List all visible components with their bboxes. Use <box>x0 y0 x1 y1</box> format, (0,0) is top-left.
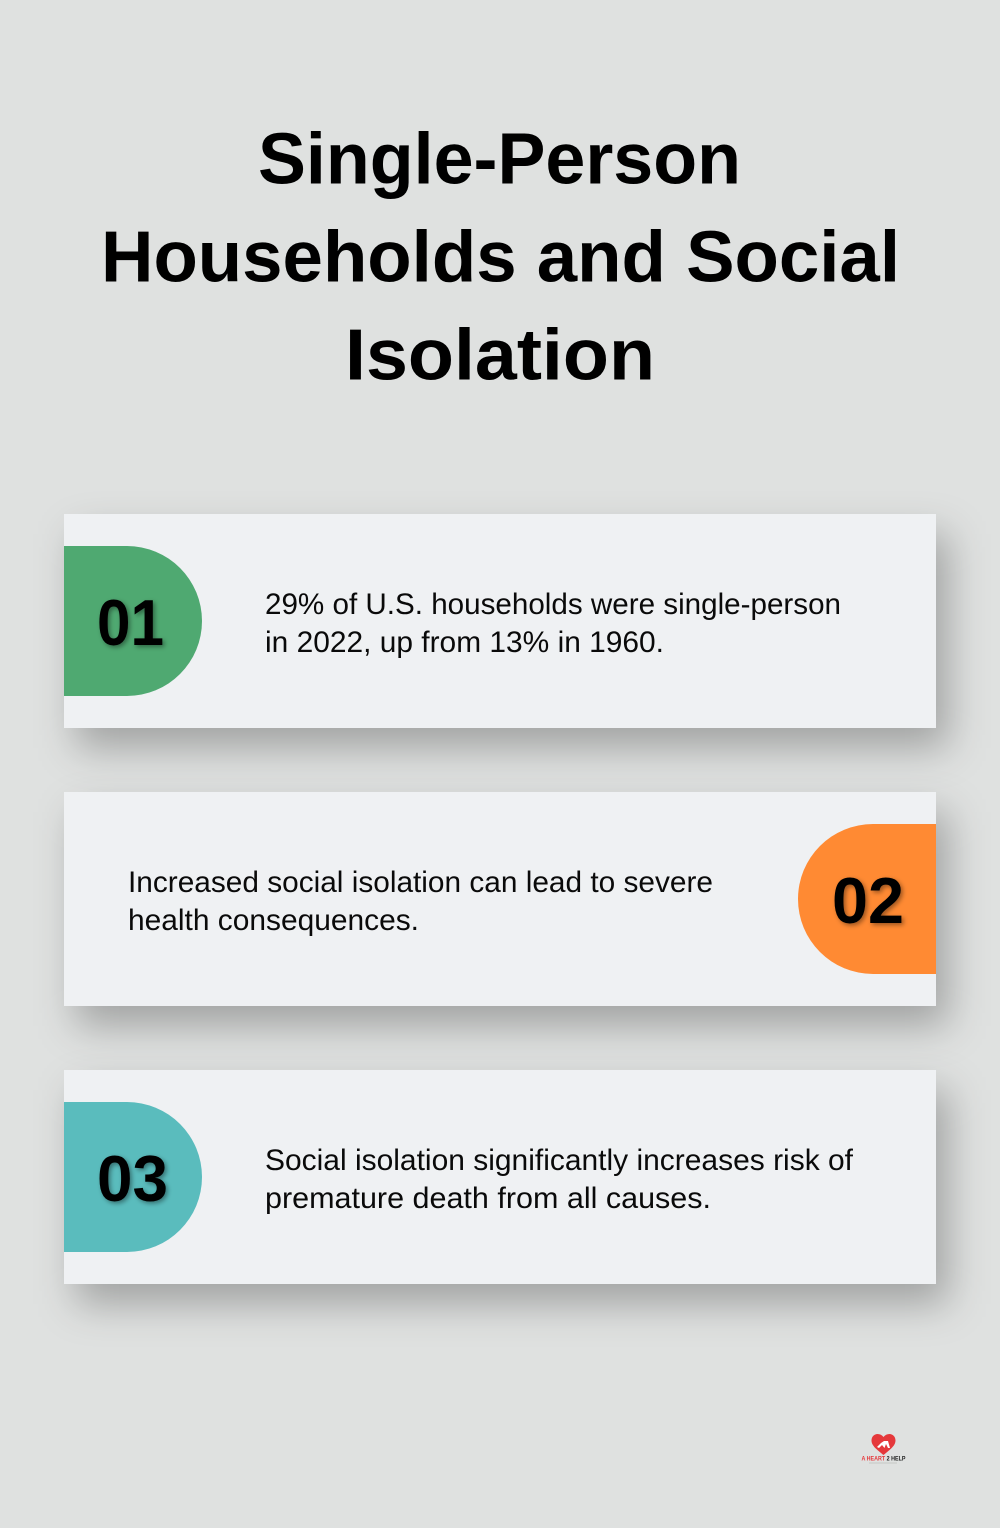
text: item 01: 29% of U.S. households were single-person <box>265 588 841 621</box>
number: 02: 02 <box>832 864 904 937</box>
title: Isolation <box>345 316 655 396</box>
badge: 02 <box>798 824 936 974</box>
number: 03: 03 <box>97 1142 168 1215</box>
panel: item 01 <box>64 514 948 748</box>
text: item 03 <box>265 1144 854 1215</box>
logo wordmark: A HEART 2 HELP <box>862 1456 906 1462</box>
title: Single-Person <box>258 120 741 200</box>
logo: A Heart 2 Help <box>862 1434 906 1464</box>
text: item 02: health consequences. <box>128 904 419 937</box>
text: item 01: in 2022, up from 13% in 1960. <box>265 626 664 659</box>
number: 01: 01 <box>97 586 164 659</box>
text: item 01 <box>265 588 841 659</box>
panel: item 03 <box>64 1070 948 1304</box>
text: item 03: Social isolation significantly increases risk of <box>265 1144 854 1177</box>
panel: item 02 <box>64 792 948 1026</box>
title <box>101 120 900 396</box>
title: Households and Social <box>101 218 900 298</box>
text: item 03: premature death from all causes. <box>265 1182 711 1215</box>
text: item 02 <box>128 866 713 937</box>
badge: 01 <box>64 546 202 696</box>
badge: 03 <box>64 1102 202 1252</box>
text: item 02: Increased social isolation can lead to severe <box>128 866 713 899</box>
icon: heart with hands <box>872 1434 896 1455</box>
